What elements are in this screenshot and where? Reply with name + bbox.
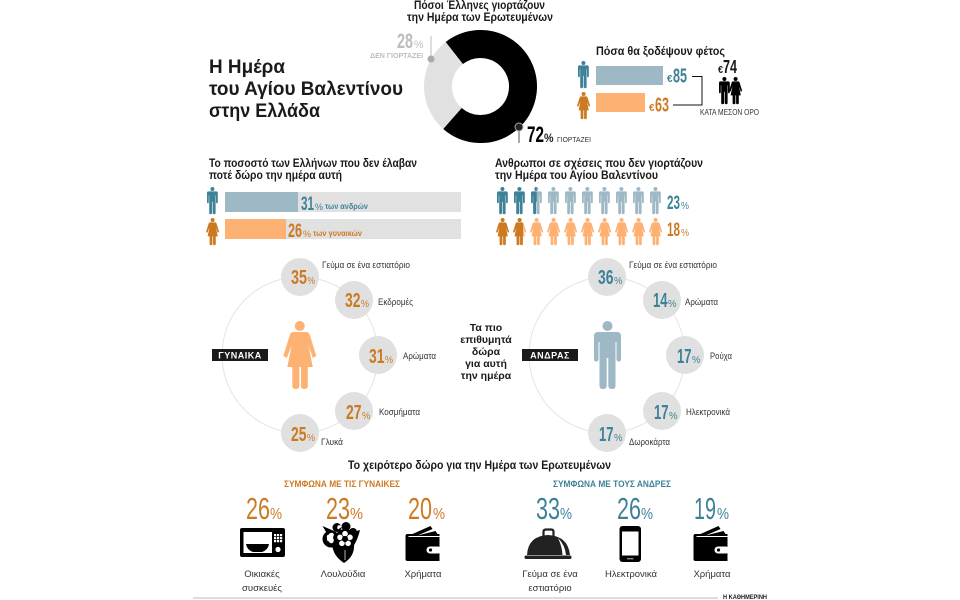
- icon: cloche: [524, 530, 572, 559]
- item: 17% electronics: %: [669, 411, 678, 422]
- item: 32% trips: [335, 281, 414, 319]
- centre caption: most wanted gifts: για αυτή: [465, 358, 507, 370]
- bar: women 26%: των γυναικών: [313, 228, 362, 238]
- callout: 28% not celebrating: ΔΕΝ ΓΙΟΡΤΑΖΕΙ: [370, 53, 423, 60]
- heading: spending: Πόσα θα ξοδέψουν φέτος: [596, 44, 725, 58]
- value: 33%: 33: [536, 492, 560, 526]
- heading: worst gift: Το χειρότερο δώρο για την Ημέρα των Ερωτευμένων: [348, 458, 611, 472]
- heading: never received a gift: [209, 158, 417, 182]
- bar: women 26%: 26: [288, 221, 302, 242]
- title: του Αγίου Βαλεντίνου: [209, 78, 403, 100]
- item: 17% electronics: [643, 392, 730, 430]
- heading: how many celebrate: την Ημέρα των Ερωτευμένων: [407, 12, 553, 24]
- pictogram: women 18%: [496, 218, 662, 245]
- label: appliances: Οικιακές: [244, 569, 280, 580]
- item: 17% clothes: Ρούχα: [710, 351, 732, 361]
- label: restaurant meal: Γεύμα σε ένα: [522, 569, 578, 580]
- callout: 28% not celebrating: %: [414, 39, 424, 51]
- heading: relationships: Ανθρωποι σε σχέσεις που δεν γιορτάζουν: [495, 158, 703, 170]
- value: 23%: 23: [667, 193, 680, 214]
- label: money: Χρήματα: [693, 569, 731, 580]
- bar: men 31%: των ανδρών: [325, 201, 368, 211]
- centre caption: most wanted gifts: [460, 322, 512, 382]
- callout: 72% celebrating: ΓΙΟΡΤΑΖΕΙ: [557, 135, 591, 144]
- value: average 74 euro: 74: [723, 57, 737, 77]
- value: 19%: 19: [694, 492, 716, 526]
- label: appliances: συσκευές: [242, 583, 282, 594]
- item: 17% gift card: 17: [599, 423, 614, 446]
- item: 14% perfumes: Αρώματα: [685, 297, 718, 307]
- centre caption: most wanted gifts: Τα πιο: [470, 322, 502, 334]
- panel: spending: [577, 44, 759, 119]
- callout: 72% celebrating: %: [544, 131, 554, 145]
- value: 19%: %: [717, 506, 729, 523]
- infographic: [193, 0, 767, 599]
- panel: men's most wanted gifts: [522, 258, 732, 452]
- value: 26%: 26: [617, 492, 641, 526]
- item: 32% trips: 32: [345, 289, 360, 312]
- title: στην Ελλάδα: [209, 100, 320, 122]
- value: 18%: 18: [667, 220, 680, 241]
- bar: men 31%: %: [315, 202, 323, 212]
- icon: wallet: [406, 526, 442, 561]
- item: 35% restaurant: %: [308, 276, 315, 287]
- bar: men 31%: [225, 192, 461, 215]
- subheading: men: ΣΥΜΦΩΝΑ ΜΕ ΤΟΥΣ ΑΝΔΡΕΣ: [553, 479, 672, 489]
- item: 32% trips: %: [361, 299, 369, 310]
- value: 18%: %: [681, 228, 689, 239]
- heading: relationships: την Ημέρα του Αγίου Βαλεντίνου: [495, 170, 658, 182]
- item: 14% perfumes: %: [668, 299, 677, 310]
- title: Η Ημέρα: [209, 56, 285, 78]
- item: 27% jewellery: Κοσμήματα: [379, 407, 420, 417]
- label: electronics: Ηλεκτρονικά: [605, 569, 658, 580]
- value: 26%: 26: [246, 492, 270, 526]
- icon: man: [207, 187, 218, 214]
- item: 35% restaurant: Γεύμα σε ένα εστιατόριο: [322, 260, 410, 270]
- icon: woman: [577, 92, 590, 119]
- panel: never received a gift: [206, 158, 461, 245]
- icon: phone: [620, 526, 641, 562]
- centre caption: most wanted gifts: την ημέρα: [461, 370, 512, 382]
- item: 31% perfumes: [359, 336, 436, 374]
- callout: 28% not celebrating: 28: [397, 30, 413, 53]
- callout: 28% not celebrating: [370, 30, 434, 62]
- label: women: ΓΥΝΑΙΚΑ: [218, 350, 262, 360]
- heading: relationships: [495, 158, 703, 182]
- value: men 85 euro: 85: [673, 66, 687, 88]
- icon: man: [578, 61, 589, 88]
- donut chart: [421, 27, 540, 146]
- item: 32% trips: Εκδρομές: [378, 297, 414, 307]
- item: 35% restaurant: [281, 258, 410, 296]
- label: women: [212, 349, 268, 361]
- value: 23%: 23: [326, 492, 350, 526]
- label: men: ΑΝΔΡΑΣ: [530, 350, 570, 360]
- value: women 63 euro: 63: [655, 94, 669, 116]
- item: 36% restaurant: [588, 258, 717, 296]
- item: 17% clothes: %: [692, 355, 701, 366]
- item: 27% jewellery: [335, 392, 420, 430]
- panel: worst gift according to women: [240, 479, 445, 594]
- item: 25% sweets: %: [307, 433, 315, 444]
- label: average: ΚΑΤΑ ΜΕΣΟΝ ΟΡΟ: [700, 108, 759, 117]
- label: appliances: [242, 569, 282, 594]
- item: 14% perfumes: [643, 281, 718, 319]
- label: men: [522, 349, 578, 361]
- heading: how many celebrate: [407, 0, 553, 24]
- item: 25% sweets: Γλυκά: [321, 437, 343, 447]
- item: 27% jewellery: %: [362, 411, 371, 422]
- label: restaurant meal: [522, 569, 578, 594]
- value: 20%: 20: [408, 492, 432, 526]
- value: men 85 euro: €: [667, 74, 673, 85]
- bar: men 31%: 31: [301, 194, 314, 215]
- item: 36% restaurant: 36: [598, 266, 614, 289]
- value: women 63 euro: €: [649, 103, 655, 114]
- label: flowers: Λουλούδια: [321, 569, 366, 580]
- pictogram: men 23%: [497, 187, 661, 214]
- item: 14% perfumes: 14: [653, 289, 668, 312]
- label: restaurant meal: εστιατόριο: [528, 583, 572, 594]
- bracket connector: [673, 76, 702, 105]
- value: 23%: %: [681, 201, 689, 212]
- panel: worst gift according to men: [522, 479, 731, 594]
- value: women 63 euro: [649, 94, 669, 116]
- value: men 85 euro: [667, 66, 687, 88]
- label: money: Χρήματα: [404, 569, 442, 580]
- item: 17% gift card: Δωροκάρτα: [629, 437, 670, 447]
- icon: man: [594, 321, 621, 389]
- subheading: women: ΣΥΜΦΩΝΑ ΜΕ ΤΙΣ ΓΥΝΑΙΚΕΣ: [284, 479, 401, 489]
- item: 31% perfumes: 31: [369, 345, 384, 368]
- value: 20%: %: [433, 506, 445, 523]
- item: 31% perfumes: %: [385, 355, 393, 366]
- callout: 72% celebrating: [515, 122, 591, 147]
- bar: women 26%: [225, 219, 461, 242]
- icon: woman: [206, 218, 219, 245]
- value: 26%: %: [270, 506, 282, 523]
- value: 33%: %: [560, 506, 572, 523]
- centre caption: most wanted gifts: δώρα: [472, 346, 501, 358]
- icon: woman: [283, 321, 316, 389]
- item: 17% clothes: 17: [677, 345, 692, 368]
- item: 17% clothes: [666, 336, 732, 374]
- item: 27% jewellery: 27: [346, 401, 362, 424]
- centre caption: most wanted gifts: επιθυμητά: [460, 334, 512, 346]
- item: 17% electronics: Ηλεκτρονικά: [686, 407, 730, 417]
- callout: 72% celebrating: 72: [527, 122, 544, 147]
- panel: women's most wanted gifts: [212, 258, 436, 452]
- item: 31% perfumes: Αρώματα: [403, 351, 436, 361]
- bar: women spending: [596, 93, 645, 112]
- icon: wallet: [694, 526, 730, 561]
- item: 36% restaurant: %: [614, 276, 623, 287]
- heading: never received a gift: ποτέ δώρο την ημέρα αυτή: [209, 170, 342, 182]
- item: 25% sweets: 25: [291, 423, 306, 446]
- heading: how many celebrate: Πόσοι Έλληνες γιορτάζουν: [414, 0, 545, 12]
- icon: microwave: [240, 528, 285, 557]
- item: 36% restaurant: Γεύμα σε ένα εστιατόριο: [629, 260, 717, 270]
- item: 17% gift card: [588, 414, 670, 452]
- item: 35% restaurant: 35: [291, 266, 307, 289]
- bar: women 26%: %: [303, 229, 311, 239]
- value: average 74 euro: [718, 57, 737, 77]
- item: 25% sweets: [281, 414, 343, 452]
- panel: people in relationships who do not celebrate: [495, 158, 703, 245]
- icon: flowers: [322, 522, 360, 563]
- item: 17% gift card: %: [614, 433, 623, 444]
- title: [209, 56, 403, 122]
- heading: never received a gift: Το ποσοστό των Ελλήνων που δεν έλαβαν: [209, 158, 417, 170]
- value: average 74 euro: €: [718, 65, 723, 76]
- item: 17% electronics: 17: [654, 401, 668, 424]
- value: 23%: %: [350, 506, 363, 523]
- icon: couple: [719, 77, 742, 104]
- value: 26%: %: [641, 506, 653, 523]
- bar: men spending: [596, 66, 663, 85]
